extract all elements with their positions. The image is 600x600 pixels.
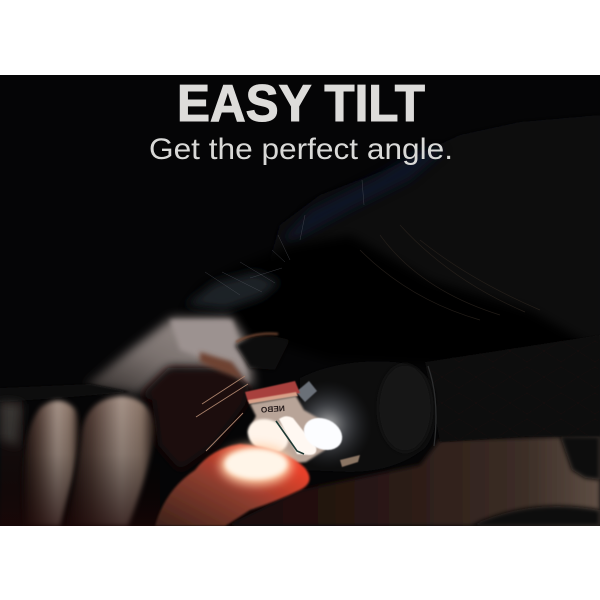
lower tilt clip — [340, 455, 360, 467]
photo panel: headlamp being tilted — [0, 75, 600, 526]
red label — [245, 381, 300, 402]
fingers — [0, 384, 160, 526]
stray hairs lit by the lamp — [196, 376, 248, 451]
dark hair at jaw — [470, 436, 600, 526]
face below headband — [225, 436, 600, 526]
knit hat — [280, 144, 446, 243]
glowing thumb — [155, 444, 309, 526]
title: EASY TILT — [177, 75, 425, 133]
front plate — [248, 396, 325, 464]
headlamp — [242, 361, 436, 472]
photo background — [0, 75, 600, 526]
left led — [246, 418, 290, 452]
middle led — [279, 416, 316, 455]
main lens — [303, 417, 343, 451]
lamp housing — [334, 362, 436, 416]
brand mark: NEBO — [261, 404, 285, 415]
headband — [425, 335, 600, 442]
subtitle: Get the perfect angle. — [149, 133, 453, 166]
reflective clip — [296, 381, 317, 402]
hair fringe — [190, 180, 576, 338]
wrist and back of hand — [85, 318, 290, 470]
